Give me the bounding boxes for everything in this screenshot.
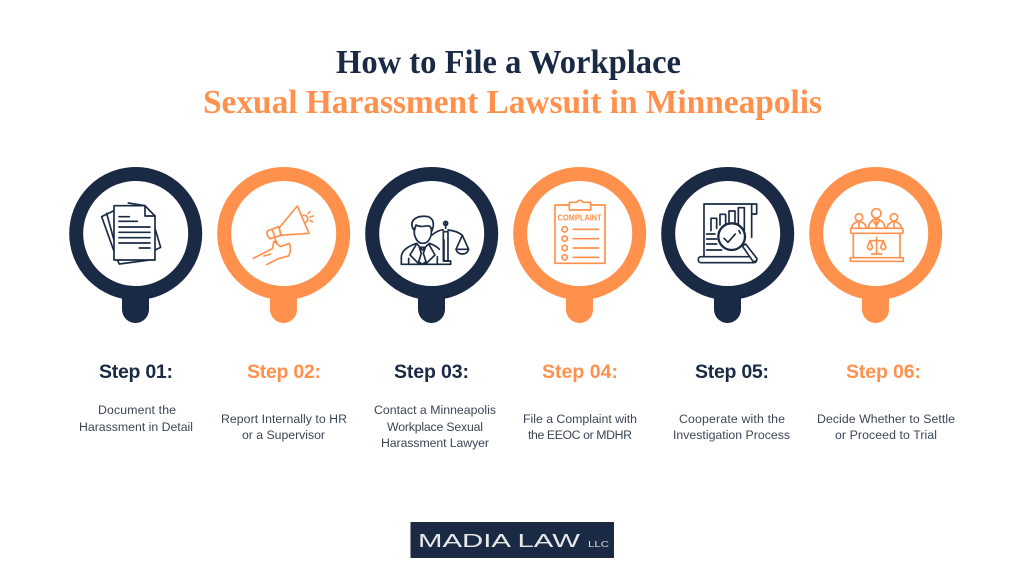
step 01 text: Document the bbox=[98, 403, 176, 417]
step 01 text: Harassment in Detail bbox=[79, 420, 193, 434]
step 06 text bbox=[817, 361, 955, 442]
logo: Madia Law LLC: LLC bbox=[588, 540, 609, 549]
step 06 text: Step 06: bbox=[846, 361, 921, 383]
step 04 text: File a Complaint with bbox=[523, 412, 637, 426]
step 05 text: Step 05: bbox=[695, 361, 769, 383]
step 06 text: or Proceed to Trial bbox=[835, 428, 937, 442]
step 03 text bbox=[374, 361, 496, 450]
icon: complaint clipboard: COMPLAINT bbox=[558, 214, 602, 223]
step 05 text bbox=[673, 361, 790, 442]
step 02 text: or a Supervisor bbox=[242, 428, 325, 442]
icon: judges at bench bbox=[850, 209, 903, 261]
step 01 marker bbox=[76, 174, 195, 323]
step 03 text: Step 03: bbox=[394, 361, 469, 383]
title bbox=[203, 44, 822, 121]
step 04 marker bbox=[520, 174, 639, 323]
step 05 text: Investigation Process bbox=[673, 428, 790, 442]
icon: report under magnifier bbox=[698, 204, 757, 263]
logo: Madia Law LLC: MADIA LAW bbox=[418, 531, 580, 551]
icon: lawyer with scales bbox=[401, 216, 469, 264]
icon: megaphone and hand bbox=[253, 206, 313, 265]
step 05 text: Cooperate with the bbox=[679, 412, 785, 426]
step 03 text: Contact a Minneapolis bbox=[374, 403, 496, 417]
title: Sexual Harassment Lawsuit in Minneapolis bbox=[203, 84, 822, 121]
step 03 text: Harassment Lawyer bbox=[381, 436, 489, 450]
step 01 text: Step 01: bbox=[99, 361, 173, 383]
icon: documents bbox=[102, 203, 161, 264]
step 06 text: Decide Whether to Settle bbox=[817, 412, 955, 426]
step 03 text: Workplace Sexual bbox=[387, 420, 483, 434]
step 02 text bbox=[221, 361, 347, 442]
step 05 marker bbox=[668, 174, 787, 323]
icon: complaint clipboard bbox=[555, 200, 605, 263]
step 02 text: Step 02: bbox=[247, 361, 321, 383]
step 01 text bbox=[79, 361, 193, 434]
step 04 text: Step 04: bbox=[542, 361, 618, 383]
logo: Madia Law LLC bbox=[410, 522, 614, 558]
step 02 marker bbox=[224, 174, 343, 323]
step 04 text: the EEOC or MDHR bbox=[528, 428, 632, 442]
step 06 marker bbox=[816, 174, 935, 323]
step 03 marker bbox=[372, 174, 491, 323]
title: How to File a Workplace bbox=[336, 44, 681, 81]
step 02 text: Report Internally to HR bbox=[221, 412, 347, 426]
step 04 text bbox=[523, 361, 637, 442]
